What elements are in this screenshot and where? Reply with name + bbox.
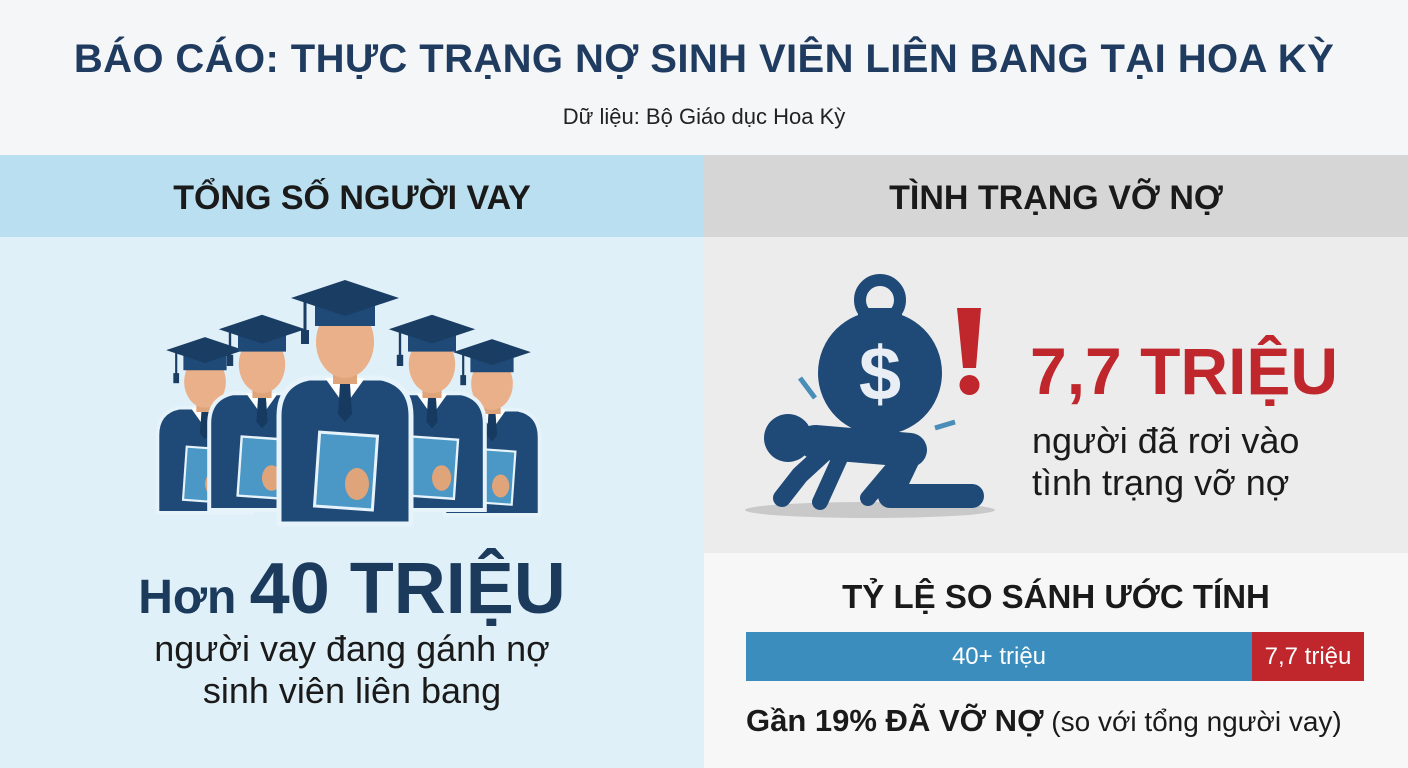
panel: default status (704, 155, 1408, 553)
left main stat: Hơn 40 TRIỆU (138, 549, 566, 629)
icon: debt weight crushing person: $ (859, 332, 901, 417)
right description: tình trạng vỡ nợ (1032, 462, 1289, 503)
icon: debt weight crushing person (745, 274, 995, 518)
right heading: TÌNH TRẠNG VỠ NỢ (889, 179, 1223, 217)
exclamation (957, 308, 981, 395)
right description: người đã rơi vào (1032, 420, 1299, 461)
comparison note: Gần 19% ĐÃ VỠ NỢ (so với tổng người vay) (746, 703, 1342, 738)
bar chart: 7,7 triệu (1265, 643, 1351, 670)
right heading (704, 155, 1408, 237)
panel: comparison (704, 553, 1408, 768)
bar chart: 40+ triệu (952, 643, 1046, 670)
left heading (0, 155, 704, 237)
icon: graduates (159, 280, 538, 522)
left description: người vay đang gánh nợ (154, 628, 550, 669)
left description: sinh viên liên bang (203, 670, 501, 711)
panel: left borrowers (0, 155, 704, 768)
subtitle: Dữ liệu: Bộ Giáo dục Hoa Kỳ (563, 104, 845, 129)
comparison heading: TỶ LỆ SO SÁNH ƯỚC TÍNH (842, 578, 1270, 615)
right main stat: 7,7 TRIỆU (1030, 334, 1338, 408)
bar chart (746, 632, 1364, 681)
right description (1032, 420, 1299, 503)
left description (154, 628, 550, 711)
left heading: TỔNG SỐ NGƯỜI VAY (173, 179, 531, 217)
title: BÁO CÁO: THỰC TRẠNG NỢ SINH VIÊN LIÊN BANG TẠI HOA KỲ (74, 37, 1334, 81)
